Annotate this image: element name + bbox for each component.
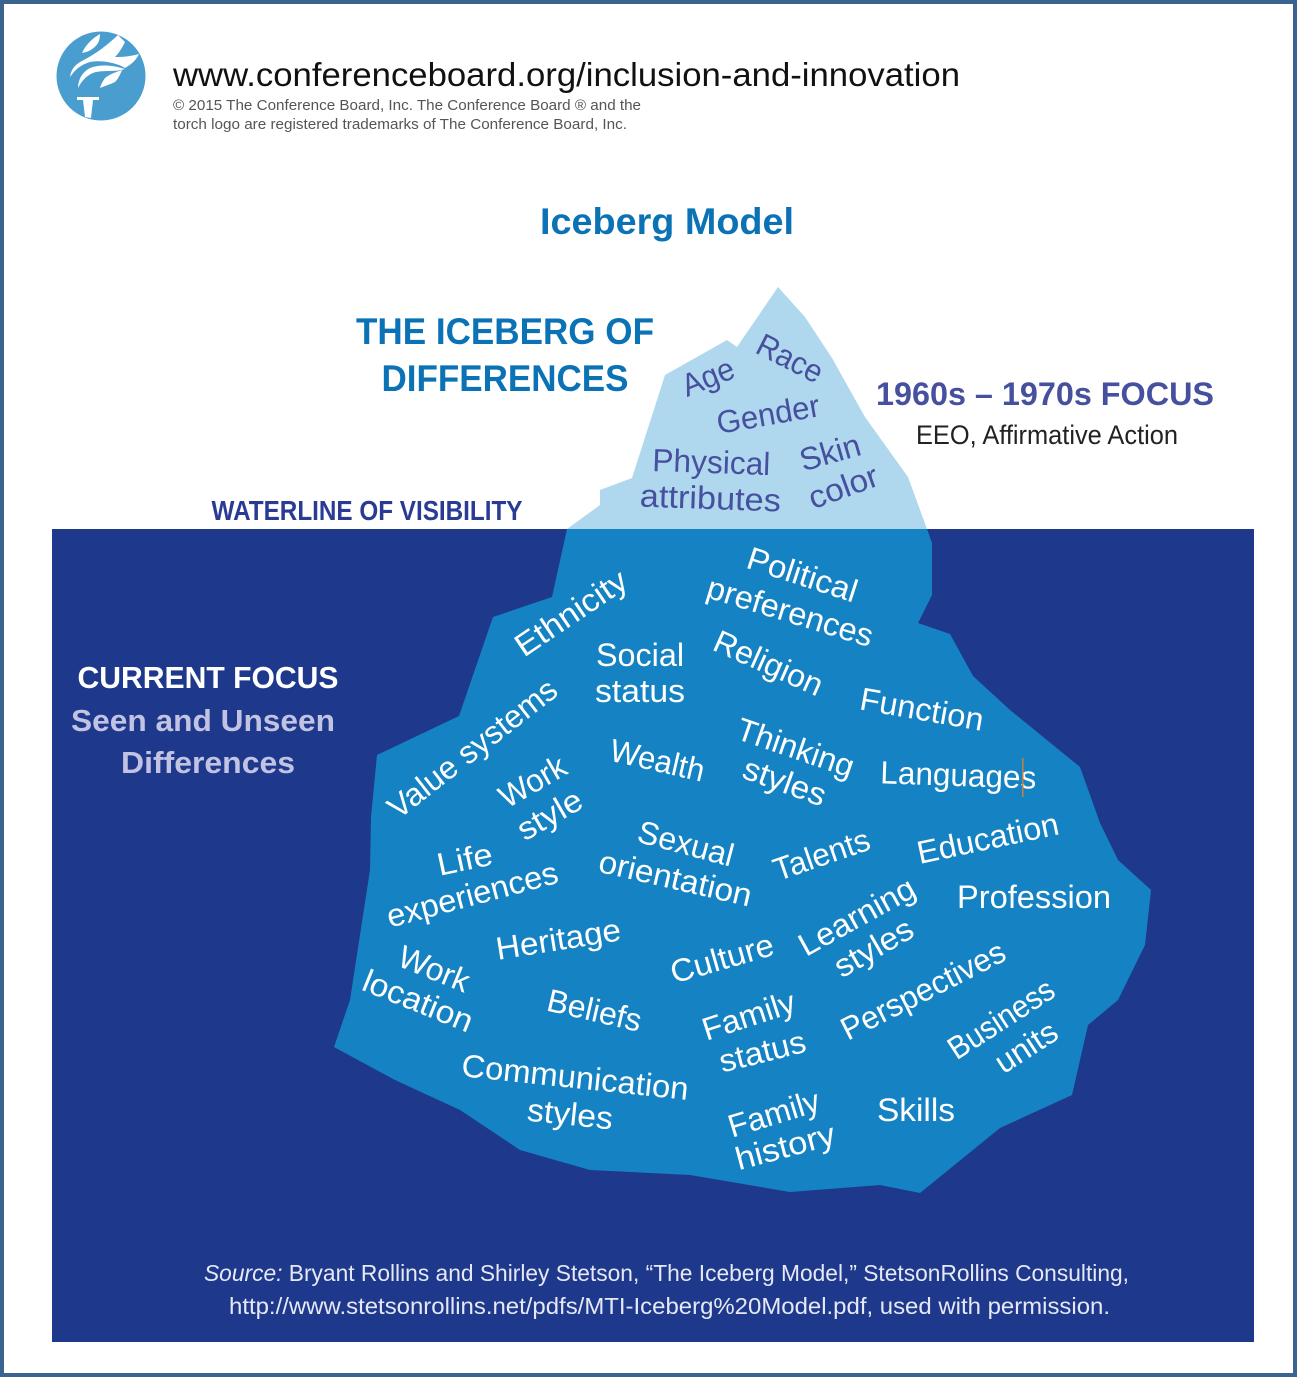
website URL: www.conferenceboard.org/inclusion-and-innovation bbox=[172, 56, 960, 93]
hidden differences labels: units bbox=[988, 1013, 1064, 1080]
hidden differences labels: Work bbox=[393, 938, 476, 1000]
visible differences labels: attributes bbox=[639, 478, 781, 518]
callout: current focus: Differences bbox=[121, 745, 295, 780]
hidden differences labels: preferences bbox=[703, 569, 878, 654]
heading: the iceberg of differences bbox=[356, 311, 654, 399]
hidden differences labels: Profession bbox=[957, 879, 1111, 915]
text cursor mark bbox=[1022, 758, 1024, 797]
callout: 1960s focus: 1960s – 1970s FOCUS bbox=[876, 376, 1214, 412]
copyright notice: torch logo are registered trademarks of The Conference Board, Inc. bbox=[173, 116, 627, 133]
visible differences labels: Gender bbox=[714, 387, 823, 441]
callout: 1960s focus: EEO, Affirmative Action bbox=[916, 420, 1178, 450]
hidden differences labels: Political bbox=[743, 540, 862, 609]
hidden differences labels: style bbox=[510, 781, 589, 848]
hidden differences labels: Life bbox=[434, 836, 496, 883]
hidden differences labels: Work bbox=[492, 747, 574, 815]
callout: current focus: Seen and Unseen bbox=[71, 703, 335, 738]
hidden differences labels: Thinking bbox=[732, 711, 859, 784]
copyright notice bbox=[173, 97, 641, 133]
label: waterline of visibility: WATERLINE OF VISIBILITY bbox=[212, 495, 523, 526]
hidden differences labels: Social bbox=[596, 637, 684, 673]
hidden differences labels: Family bbox=[724, 1083, 824, 1144]
hidden differences labels: styles bbox=[827, 910, 920, 985]
visible differences labels: Physical bbox=[652, 442, 771, 482]
hidden differences labels: Value systems bbox=[380, 671, 564, 826]
hidden differences labels: Languages bbox=[880, 754, 1037, 796]
source text: Source: Bryant Rollins and Shirley Stetson, “The Iceberg Model,” StetsonRollins Consulting, bbox=[204, 1260, 1129, 1286]
hidden differences labels: Culture bbox=[666, 927, 778, 990]
iceberg tip bbox=[567, 287, 927, 529]
hidden differences labels: Religion bbox=[708, 623, 829, 703]
hidden differences labels: Heritage bbox=[493, 912, 623, 967]
source text: http://www.stetsonrollins.net/pdfs/MTI-Iceberg%20Model.pdf, used with permission. bbox=[229, 1293, 1110, 1319]
visible differences labels: Age bbox=[676, 350, 740, 404]
hidden differences labels bbox=[358, 540, 1111, 1177]
icon: torch logo bbox=[56, 32, 146, 120]
hidden differences labels: Perspectives bbox=[835, 933, 1011, 1047]
visible differences labels: Race bbox=[751, 326, 829, 390]
callout: current focus: CURRENT FOCUS bbox=[78, 660, 338, 695]
water panel bbox=[52, 529, 1254, 1342]
visible differences labels: color bbox=[803, 457, 884, 516]
hidden differences labels: Communication bbox=[460, 1047, 690, 1107]
hidden differences labels: Sexual bbox=[634, 813, 738, 873]
title: Iceberg Model bbox=[540, 201, 794, 242]
hidden differences labels: history bbox=[731, 1116, 839, 1177]
iceberg underwater bbox=[334, 529, 1151, 1193]
hidden differences labels: orientation bbox=[595, 843, 756, 913]
hidden differences labels: Education bbox=[914, 806, 1062, 871]
hidden differences labels: Function bbox=[857, 681, 987, 738]
hidden differences labels: Family bbox=[697, 984, 800, 1047]
source text bbox=[204, 1260, 1129, 1319]
hidden differences labels: Ethnicity bbox=[508, 562, 634, 664]
hidden differences labels: Wealth bbox=[607, 732, 708, 789]
hidden differences labels: styles bbox=[738, 750, 831, 813]
hidden differences labels: status bbox=[595, 673, 685, 709]
heading: the iceberg of differences: DIFFERENCES bbox=[382, 358, 628, 399]
visible differences labels: Skin bbox=[795, 427, 865, 478]
hidden differences labels: experiences bbox=[382, 854, 562, 935]
hidden differences labels: Beliefs bbox=[544, 982, 645, 1039]
callout: current focus bbox=[71, 660, 338, 780]
hidden differences labels: Skills bbox=[877, 1092, 955, 1128]
heading: the iceberg of differences: THE ICEBERG OF bbox=[356, 311, 654, 352]
hidden differences labels: styles bbox=[526, 1092, 615, 1136]
callout: 1960s focus bbox=[876, 376, 1214, 450]
hidden differences labels: Talents bbox=[768, 821, 875, 888]
hidden differences labels: status bbox=[715, 1023, 809, 1079]
hidden differences labels: location bbox=[358, 962, 479, 1039]
copyright notice: © 2015 The Conference Board, Inc. The Conference Board ® and the bbox=[173, 97, 641, 114]
visible differences labels bbox=[639, 326, 884, 518]
hidden differences labels: Learning bbox=[792, 870, 921, 963]
hidden differences labels: Business bbox=[941, 971, 1061, 1067]
